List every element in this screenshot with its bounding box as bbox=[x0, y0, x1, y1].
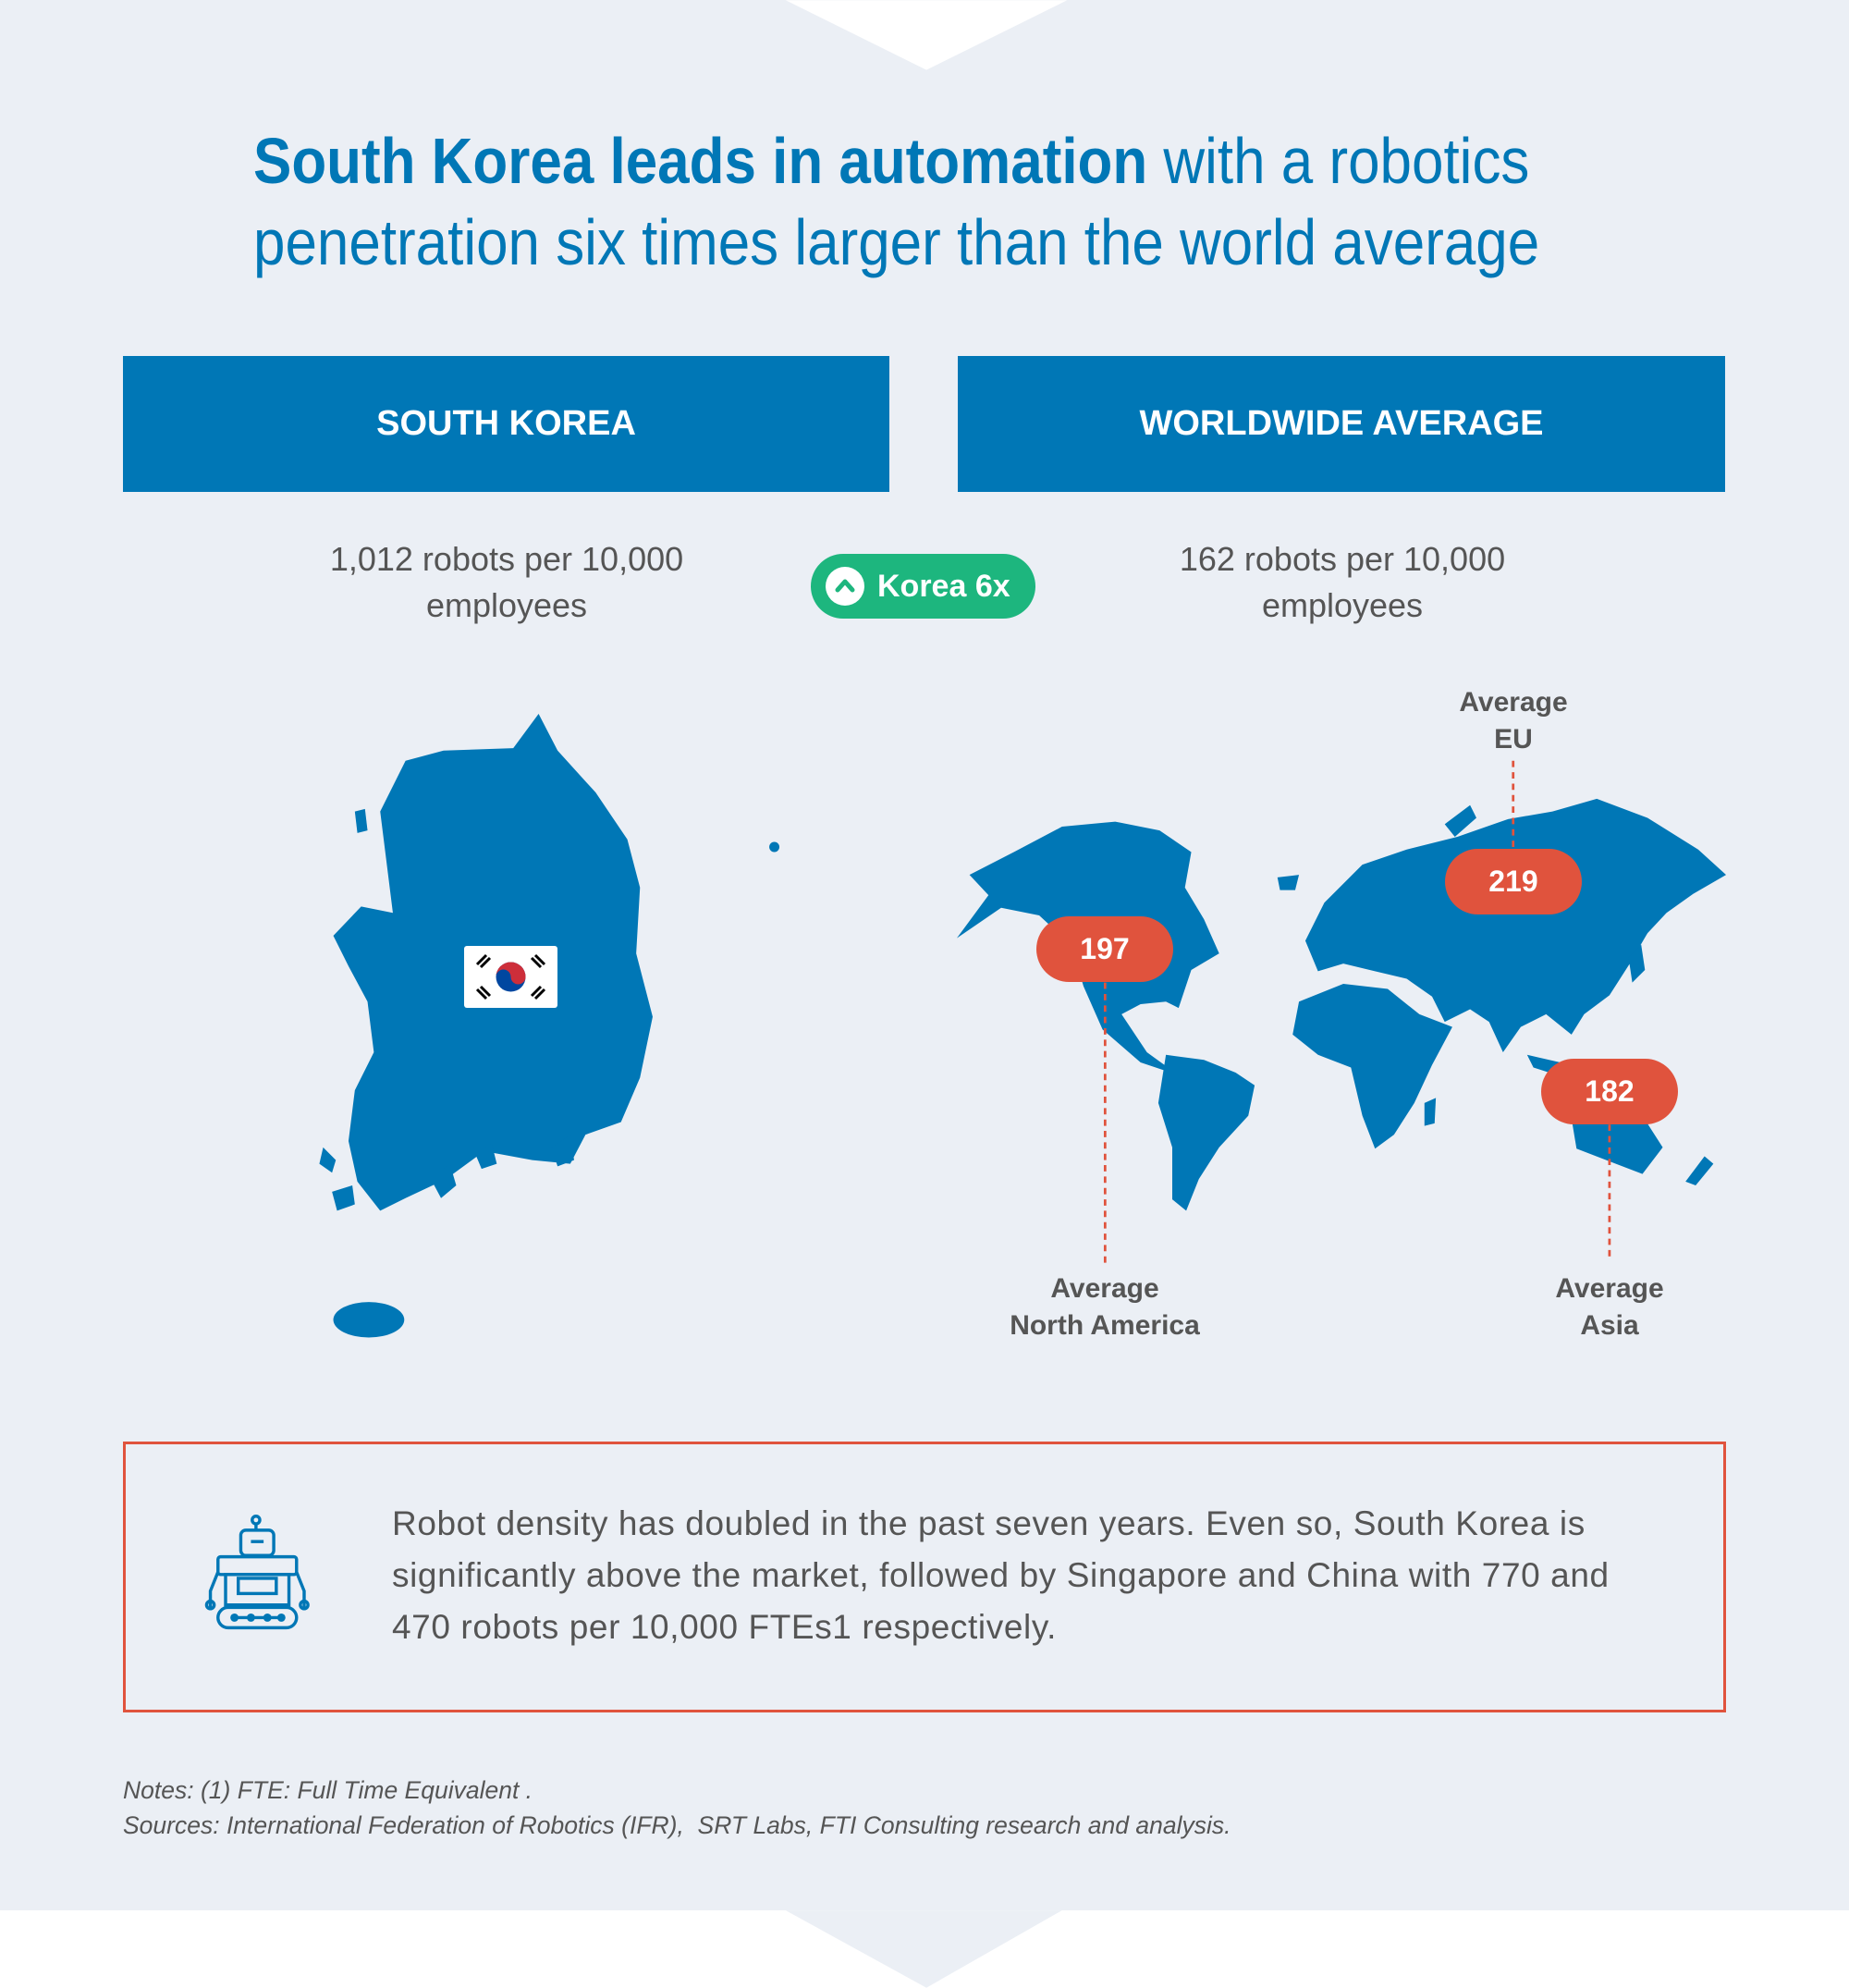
header: worldwide average: WORLDWIDE AVERAGE bbox=[1139, 404, 1543, 443]
header: south korea bbox=[123, 356, 889, 492]
world map bbox=[957, 799, 1726, 1210]
stat: world: employees bbox=[1262, 586, 1423, 624]
title: penetration six times larger than the world average bbox=[253, 206, 1539, 278]
dashed lines bbox=[1105, 761, 1610, 1264]
header: south korea: SOUTH KOREA bbox=[376, 404, 636, 443]
badge: Korea 6x: Korea 6x bbox=[877, 569, 1010, 604]
pill: 197: 197 bbox=[1080, 932, 1130, 965]
callout text: Robot density has doubled in the past seven years. Even so, South Korea is bbox=[392, 1504, 1586, 1542]
stat: korea: 1,012 robots per 10,000 bbox=[330, 540, 683, 578]
label: average north america: North America bbox=[1010, 1310, 1200, 1341]
label: average asia: Average bbox=[1555, 1273, 1664, 1304]
callout text: 470 robots per 10,000 FTEs1 respectively. bbox=[392, 1608, 1057, 1646]
title: South Korea leads in automation with a robotics bbox=[253, 125, 1529, 197]
korea map bbox=[319, 714, 779, 1337]
stat: world bbox=[1180, 540, 1505, 624]
title bbox=[253, 125, 1539, 278]
callout box bbox=[123, 1442, 1726, 1712]
robot icon bbox=[206, 1516, 308, 1627]
notes bbox=[123, 1776, 1231, 1839]
label: average asia: Asia bbox=[1580, 1310, 1639, 1341]
label: average EU: EU bbox=[1494, 724, 1533, 755]
label: average EU bbox=[1459, 687, 1568, 755]
pill: 197 bbox=[1036, 916, 1173, 982]
header: worldwide average bbox=[958, 356, 1725, 492]
stat: world: 162 robots per 10,000 bbox=[1180, 540, 1505, 578]
label: average EU: Average bbox=[1459, 687, 1568, 718]
pill: 182: 182 bbox=[1585, 1074, 1635, 1108]
notes: Sources: International Federation of Robotics (IFR), SRT Labs, FTI Consulting research and analysis. bbox=[123, 1811, 1231, 1839]
stat: korea bbox=[330, 540, 683, 624]
callout text: significantly above the market, followed by Singapore and China with 770 and bbox=[392, 1556, 1610, 1594]
pill: 182 bbox=[1541, 1059, 1678, 1124]
notes: Notes: (1) FTE: Full Time Equivalent . bbox=[123, 1776, 533, 1804]
label: average north america bbox=[1010, 1273, 1200, 1341]
icon: up chevron bbox=[826, 567, 864, 606]
stat: korea: employees bbox=[426, 586, 587, 624]
label: average asia bbox=[1555, 1273, 1664, 1341]
callout text bbox=[392, 1504, 1610, 1646]
label: average north america: Average bbox=[1050, 1273, 1159, 1304]
badge: Korea 6x bbox=[811, 554, 1035, 619]
flag: south korea bbox=[464, 946, 557, 1008]
pill: 219: 219 bbox=[1488, 865, 1538, 898]
pill: 219 bbox=[1445, 849, 1582, 914]
